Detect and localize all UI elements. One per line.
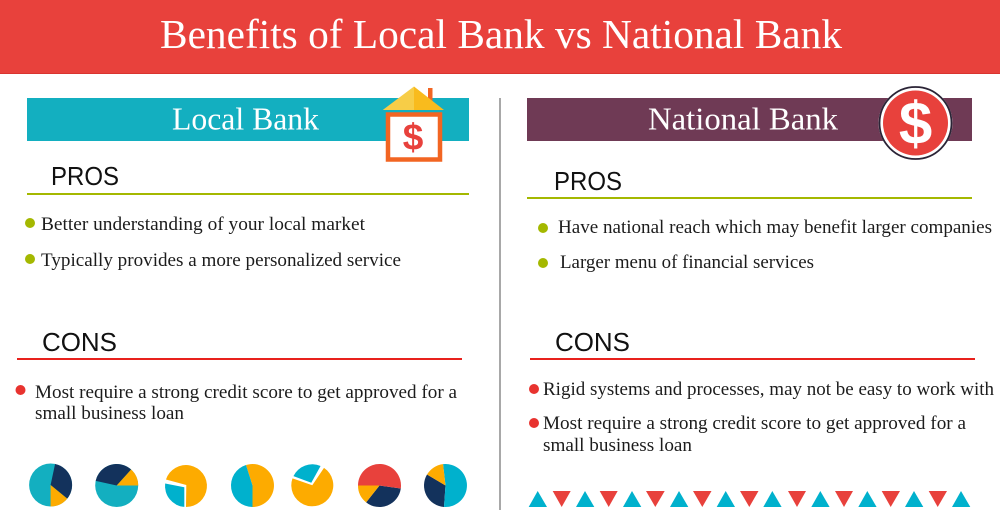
local pros list: Better understanding of your local market [41, 214, 366, 235]
national cons list: small business loan [543, 435, 692, 456]
icon: dollar coin [878, 86, 952, 160]
panel: local bank [16, 86, 469, 507]
local pros list: Typically provides a more personalized service [41, 250, 401, 271]
local pros list [25, 214, 401, 271]
title banner: Benefits of Local Bank vs National Bank [160, 11, 843, 57]
pie 6 [358, 464, 401, 507]
icon: dollar coin: $ [899, 90, 932, 157]
national bank heading [527, 98, 972, 141]
local cons list: Most require a strong credit score to get approved for a [35, 382, 458, 403]
title banner [0, 0, 1000, 74]
triangle pattern [529, 491, 970, 507]
local bank heading [27, 98, 469, 141]
pie 7 [424, 464, 467, 507]
national pros list [538, 217, 992, 273]
panel: national bank [527, 86, 994, 507]
pie 4 [231, 464, 274, 507]
national bank heading: National Bank [648, 100, 838, 136]
pie charts row [29, 464, 467, 507]
national cons list [529, 379, 994, 456]
national pros list: Larger menu of financial services [560, 252, 814, 273]
national cons list: Most require a strong credit score to get approved for a [543, 413, 967, 434]
pie 2 [95, 464, 138, 507]
pie 5 [291, 464, 333, 506]
national pros list: Have national reach which may benefit larger companies [558, 217, 992, 238]
local cons list: small business loan [35, 403, 184, 424]
icon: house with dollar sign: $ [403, 116, 424, 158]
pie 3 [165, 465, 207, 507]
local cons list [16, 382, 458, 424]
local bank heading: Local Bank [172, 100, 319, 136]
icon: house with dollar sign [383, 86, 444, 160]
local pros heading: PROS [51, 161, 119, 191]
national pros heading: PROS [554, 166, 622, 196]
pie 1 [29, 464, 72, 506]
national cons list: Rigid systems and processes, may not be easy to work with [543, 379, 994, 400]
local cons heading: CONS [42, 327, 117, 357]
national cons heading: CONS [555, 327, 630, 357]
